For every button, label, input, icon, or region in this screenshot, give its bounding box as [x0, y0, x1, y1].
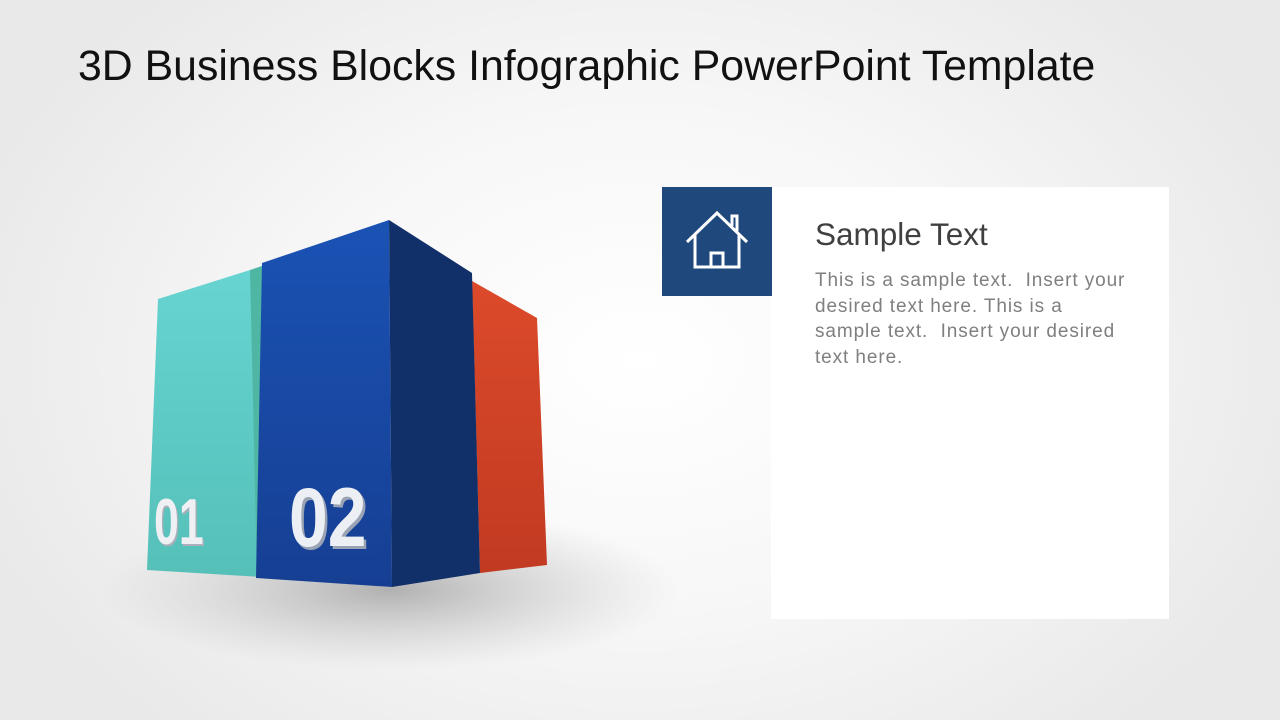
3D blocks graphic: [147, 220, 632, 656]
panel heading: Sample Text: [815, 216, 988, 252]
block: orange: [472, 281, 547, 573]
number 01: 01: [154, 485, 204, 558]
block 02: blue: [256, 220, 480, 587]
number 01: 01: [155, 487, 205, 560]
number 02: 02: [292, 474, 369, 568]
icon box: house: [662, 187, 772, 296]
shadow: [100, 510, 680, 670]
title: 3D Business Blocks Infographic PowerPoint Template: [78, 42, 1095, 90]
panel body text: This is a sample text. Insert your desired text here. This is a sample text. Insert your desired text here.: [815, 270, 1125, 368]
block 01: teal: [147, 266, 262, 578]
text panel: [771, 187, 1169, 619]
number 02: 02: [289, 471, 367, 564]
